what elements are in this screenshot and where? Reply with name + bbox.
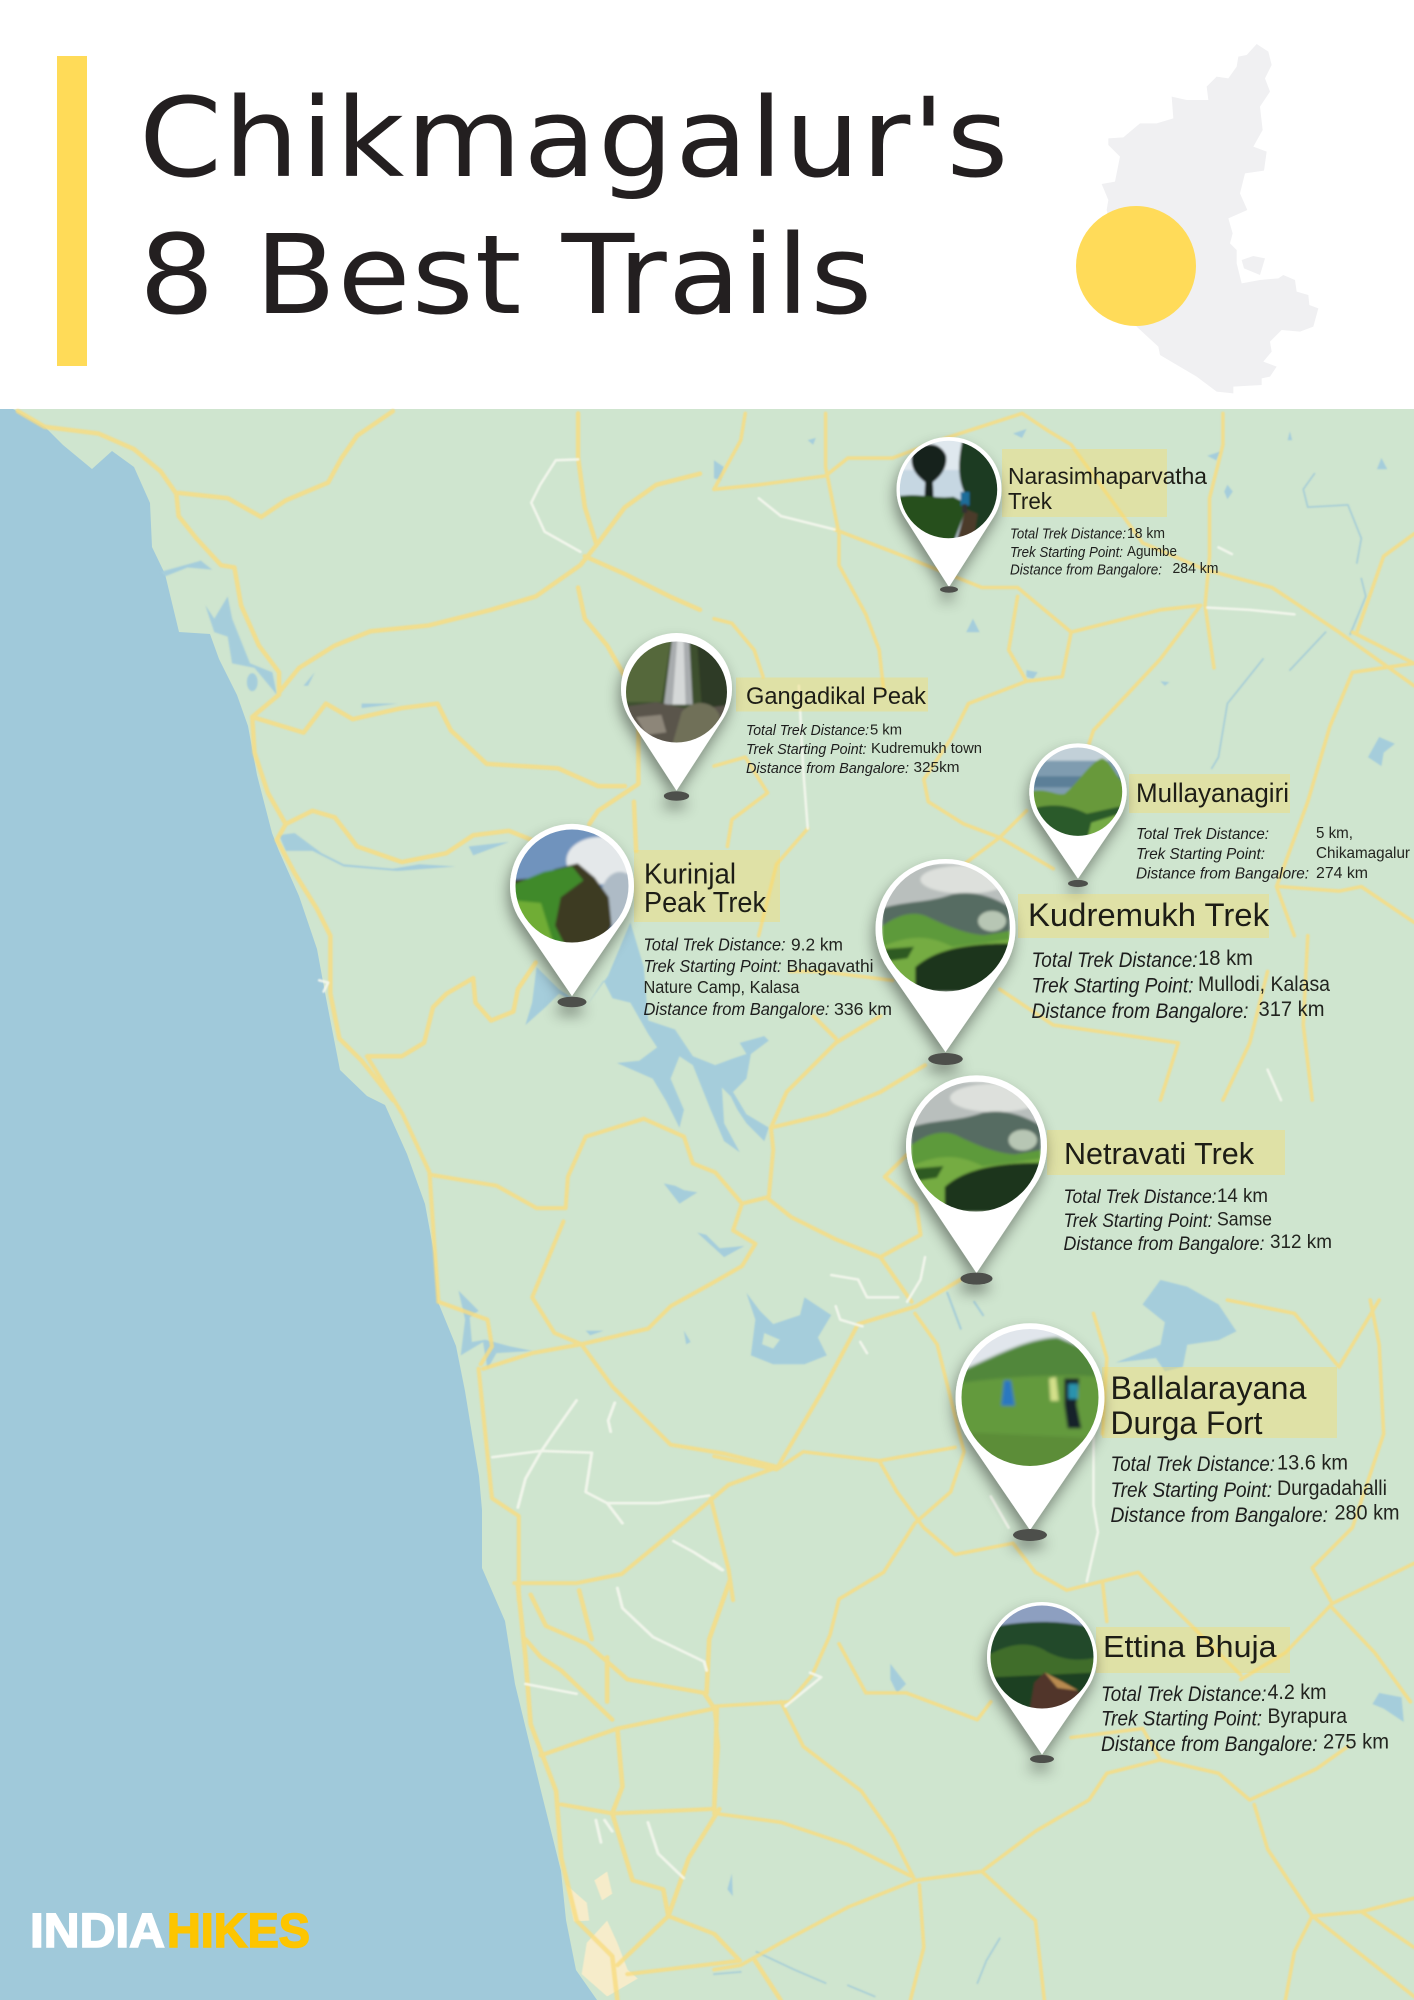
details: Distance from Bangalore: [644, 999, 830, 1019]
details: Mullodi, Kalasa [1198, 973, 1330, 996]
map land [0, 409, 1414, 2000]
title: Chikmagalur's [139, 74, 1008, 202]
map sea [0, 409, 597, 2000]
details [1010, 526, 1218, 578]
pin marker [956, 1323, 1105, 1541]
title: Netravati Trek [1064, 1136, 1254, 1171]
details: 13.6 km [1277, 1452, 1348, 1474]
details: Samse [1217, 1208, 1272, 1230]
title: Mullayanagiri [1136, 778, 1289, 808]
map urban patches [566, 1871, 638, 1996]
pin marker [1029, 743, 1127, 887]
details: 14 km [1217, 1185, 1268, 1207]
pin marker [876, 859, 1015, 1065]
details: Trek Starting Point: [1136, 846, 1265, 863]
details: Distance from Bangalore: [1136, 866, 1309, 882]
details: Agumbe [1127, 544, 1177, 560]
details [1136, 825, 1411, 882]
title: Narasimhaparvatha [1008, 463, 1207, 489]
title [644, 858, 766, 919]
details: Distance from Bangalore: [1064, 1233, 1264, 1255]
details: Distance from Bangalore: [1110, 1504, 1328, 1527]
label highlight [1047, 1130, 1285, 1175]
label highlight [1002, 449, 1167, 517]
details: 325km [914, 759, 960, 776]
details: 274 km [1316, 865, 1368, 882]
pin: Ballalarayana Durga Fort [955, 1322, 1400, 1541]
details: Total Trek Distance: [644, 934, 786, 954]
details: Total Trek Distance: [1101, 1683, 1266, 1706]
title [1110, 1370, 1307, 1441]
pin marker [510, 824, 634, 1007]
details: Trek Starting Point: [1101, 1708, 1262, 1730]
map roads [18, 411, 1414, 2000]
photo: rock peak [516, 830, 628, 942]
details [644, 934, 892, 1019]
details [1064, 1185, 1332, 1255]
details: 18 km [1198, 947, 1253, 970]
label highlight [1018, 894, 1269, 938]
details: Total Trek Distance: [746, 722, 869, 739]
details: 9.2 km [791, 934, 843, 954]
pin: Netravati Trek [906, 1075, 1332, 1285]
label highlight [1096, 1627, 1290, 1673]
photo: waterfall [626, 642, 727, 742]
details [746, 722, 982, 777]
map [0, 409, 1414, 2000]
pin: Kudremukh Trek [876, 859, 1330, 1065]
details: Total Trek Distance: [1110, 1453, 1275, 1476]
pin: Narasimhaparvatha Trek [895, 436, 1218, 593]
photo: green hills [882, 864, 1010, 992]
pin: Kurinjal Peak Trek [510, 824, 892, 1019]
pin: Mullayanagiri [1029, 743, 1411, 887]
pin marker [906, 1075, 1047, 1285]
details: 18 km [1127, 526, 1165, 542]
logo: Indiahikes: INDIA [30, 1905, 165, 1958]
header background [0, 0, 1414, 409]
map lakes and rivers [161, 429, 1404, 1896]
photo: dark hills with rock [990, 1606, 1094, 1708]
details: 317 km [1258, 998, 1324, 1021]
photo: forest trail [900, 440, 998, 538]
pin marker [897, 437, 1002, 593]
pin: Ettina Bhuja [985, 1600, 1389, 1763]
title: Ettina Bhuja [1103, 1629, 1277, 1664]
pin: Gangadikal Peak [621, 633, 982, 801]
title [1008, 463, 1207, 514]
title: Durga Fort [1110, 1405, 1263, 1441]
details: 336 km [834, 999, 892, 1019]
details [1110, 1452, 1400, 1527]
label highlight [1102, 1367, 1337, 1438]
photo: hikers on meadow [962, 1329, 1098, 1466]
icon: Karnataka state with location circle [1076, 44, 1318, 393]
details: Chikamagalur [1316, 845, 1411, 862]
details: 280 km [1334, 1502, 1400, 1524]
label highlight [1129, 774, 1290, 813]
title: Kurinjal [644, 858, 736, 890]
details: Trek Starting Point: [746, 741, 866, 758]
details: Total Trek Distance: [1010, 526, 1126, 542]
details: Trek Starting Point: [1110, 1479, 1272, 1502]
details: Distance from Bangalore: [1010, 562, 1162, 578]
title: Ballalarayana [1110, 1370, 1307, 1406]
photo: green ridge [1034, 748, 1122, 836]
details: 5 km, [1316, 825, 1353, 842]
pin marker [987, 1602, 1097, 1763]
accent bar [57, 56, 87, 366]
title: Trek [1008, 488, 1052, 514]
details: Distance from Bangalore: [746, 760, 909, 777]
details: Trek Starting Point: [1064, 1210, 1212, 1232]
details: Nature Camp, Kalasa [644, 977, 800, 997]
details: Durgadahalli [1277, 1477, 1387, 1500]
label highlight [634, 850, 780, 922]
details: Bhagavathi [786, 956, 874, 976]
logo: Indiahikes: HIKES [167, 1905, 310, 1958]
label highlight [736, 678, 928, 712]
map white trails [319, 459, 1294, 1878]
title: Peak Trek [644, 887, 766, 919]
details: 5 km [870, 722, 902, 738]
details: Trek Starting Point: [1032, 974, 1194, 998]
details: Distance from Bangalore: [1101, 1733, 1318, 1756]
details: Total Trek Distance: [1032, 949, 1198, 972]
title [139, 74, 1008, 339]
details: Trek Starting Point: [644, 956, 782, 976]
title: Kudremukh Trek [1028, 897, 1270, 933]
logo: Indiahikes [30, 1905, 310, 1958]
details [1032, 947, 1330, 1023]
title: 8 Best Trails [139, 211, 872, 339]
details: 312 km [1270, 1231, 1332, 1253]
details: Trek Starting Point: [1010, 545, 1123, 561]
details: Total Trek Distance: [1064, 1186, 1216, 1208]
details [1101, 1681, 1389, 1756]
details: 4.2 km [1268, 1681, 1326, 1704]
details: Distance from Bangalore: [1032, 1000, 1248, 1023]
pin marker [621, 633, 732, 801]
details: Kudremukh town [871, 740, 982, 757]
title: Gangadikal Peak [746, 683, 927, 710]
photo: green hills [911, 1082, 1041, 1212]
details: 284 km [1172, 561, 1218, 577]
details: Byrapura [1268, 1705, 1347, 1728]
details: 275 km [1323, 1730, 1389, 1754]
details: Total Trek Distance: [1136, 826, 1269, 843]
